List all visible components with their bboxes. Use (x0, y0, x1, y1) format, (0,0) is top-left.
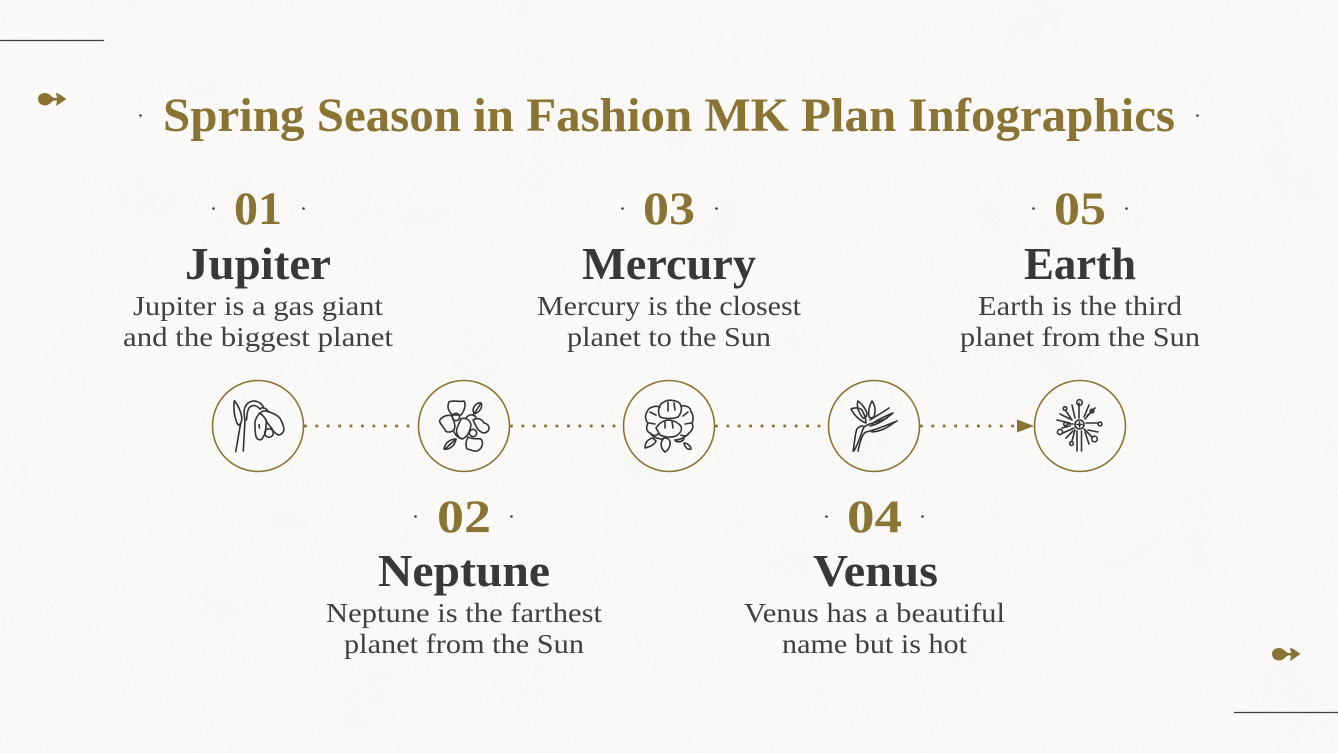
heading: Mercury: Mercury (582, 238, 756, 289)
step number 05 (1032, 183, 1128, 235)
arrow head (1017, 420, 1034, 432)
step 05: Earth (960, 183, 1200, 352)
description: Venus: name but is hot (782, 628, 967, 659)
step number 01: 01 (234, 183, 282, 235)
step number 04: 04 (847, 491, 902, 543)
description: Jupiter (123, 290, 393, 352)
icon: snowdrop (212, 380, 304, 472)
icon: bottom-right ornament (1272, 648, 1300, 661)
description: Jupiter: Jupiter is a gas giant (133, 290, 383, 321)
icon: blossom (418, 380, 510, 472)
step 02: Neptune (326, 491, 602, 659)
description: Earth (960, 290, 1200, 352)
step number 02: 02 (437, 491, 491, 543)
step number 05: 05 (1054, 183, 1106, 235)
icon: peony (624, 380, 714, 472)
step 03: Mercury (537, 183, 801, 352)
icon: top-left ornament (38, 92, 66, 106)
step number 01 (212, 183, 305, 235)
description: Earth: Earth is the third (978, 290, 1182, 321)
description: Earth: planet from the Sun (960, 321, 1200, 352)
step 01: Jupiter (123, 183, 393, 352)
timeline connector (304, 425, 1016, 427)
step number 02 (414, 491, 513, 543)
top-left rule (0, 40, 104, 42)
heading: Neptune: Neptune (378, 545, 550, 596)
description: Venus (744, 597, 1005, 659)
description: Venus: Venus has a beautiful (744, 597, 1005, 628)
heading: Jupiter: Jupiter (185, 238, 331, 289)
description: Neptune (326, 597, 602, 659)
description: Neptune: Neptune is the farthest (326, 597, 602, 628)
step number 04 (825, 491, 924, 543)
description: Neptune: planet from the Sun (344, 628, 584, 659)
step number 03 (621, 183, 718, 235)
step number 03: 03 (643, 183, 695, 235)
icon: bird of paradise (828, 380, 920, 472)
description: Jupiter: and the biggest planet (123, 321, 393, 352)
description: Mercury (537, 290, 801, 352)
heading: Earth: Earth (1024, 238, 1136, 289)
icon: dandelion (1034, 380, 1126, 472)
bottom-right rule (1234, 712, 1338, 714)
title: Spring Season in Fashion MK Plan Infographics (163, 90, 1175, 142)
description: Mercury: Mercury is the closest (537, 290, 801, 321)
heading: Venus: Venus (813, 545, 938, 596)
step 04: Venus (744, 491, 1005, 659)
description: Mercury: planet to the Sun (567, 321, 771, 352)
